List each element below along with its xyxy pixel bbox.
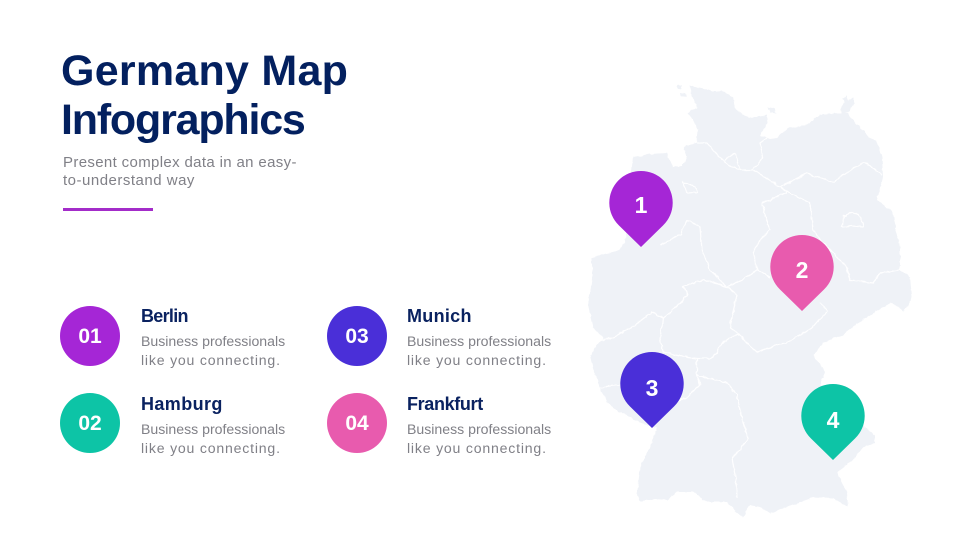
item: Hamburg	[141, 394, 285, 456]
pin 1	[609, 171, 673, 247]
badge 03	[327, 306, 387, 366]
title: Infographics	[61, 96, 305, 144]
pin 3	[620, 352, 684, 428]
pin 4: 4	[827, 407, 840, 433]
badge 01	[60, 306, 120, 366]
item: Munich: like you connecting.	[407, 352, 547, 368]
title: Germany Map	[61, 47, 348, 95]
badge 02	[60, 393, 120, 453]
item: Berlin: like you connecting.	[141, 352, 281, 368]
badge 02: 02	[78, 412, 102, 435]
item: Berlin	[141, 306, 285, 368]
islands	[677, 84, 854, 114]
item: Frankfurt: Business professionals	[407, 421, 551, 437]
badge 03: 03	[345, 325, 369, 348]
item: Frankfurt	[407, 394, 551, 456]
item: Munich	[407, 306, 551, 368]
map of Germany	[588, 84, 912, 518]
badge 04: 04	[345, 412, 369, 435]
badge 01: 01	[78, 325, 102, 348]
item: Hamburg: Business professionals	[141, 421, 285, 437]
item: Hamburg: like you connecting.	[141, 440, 281, 456]
accent line	[63, 208, 153, 211]
badge 04	[327, 393, 387, 453]
pin 2: 2	[796, 257, 808, 283]
pin 4	[801, 384, 865, 460]
item: Munich: Munich	[407, 306, 472, 326]
item: Berlin: Berlin	[141, 306, 188, 326]
subtitle	[63, 154, 297, 189]
subtitle: to-understand way	[63, 172, 195, 189]
item: Frankfurt: Frankfurt	[407, 394, 483, 414]
pin 1: 1	[635, 192, 648, 218]
title	[61, 47, 348, 144]
item: Munich: Business professionals	[407, 333, 551, 349]
item: Frankfurt: like you connecting.	[407, 440, 547, 456]
state borders	[598, 138, 900, 498]
item: Hamburg: Hamburg	[141, 394, 223, 414]
pin 2	[770, 235, 834, 311]
pin 3: 3	[646, 375, 658, 401]
subtitle: Present complex data in an easy-	[63, 154, 297, 171]
item: Berlin: Business professionals	[141, 333, 285, 349]
